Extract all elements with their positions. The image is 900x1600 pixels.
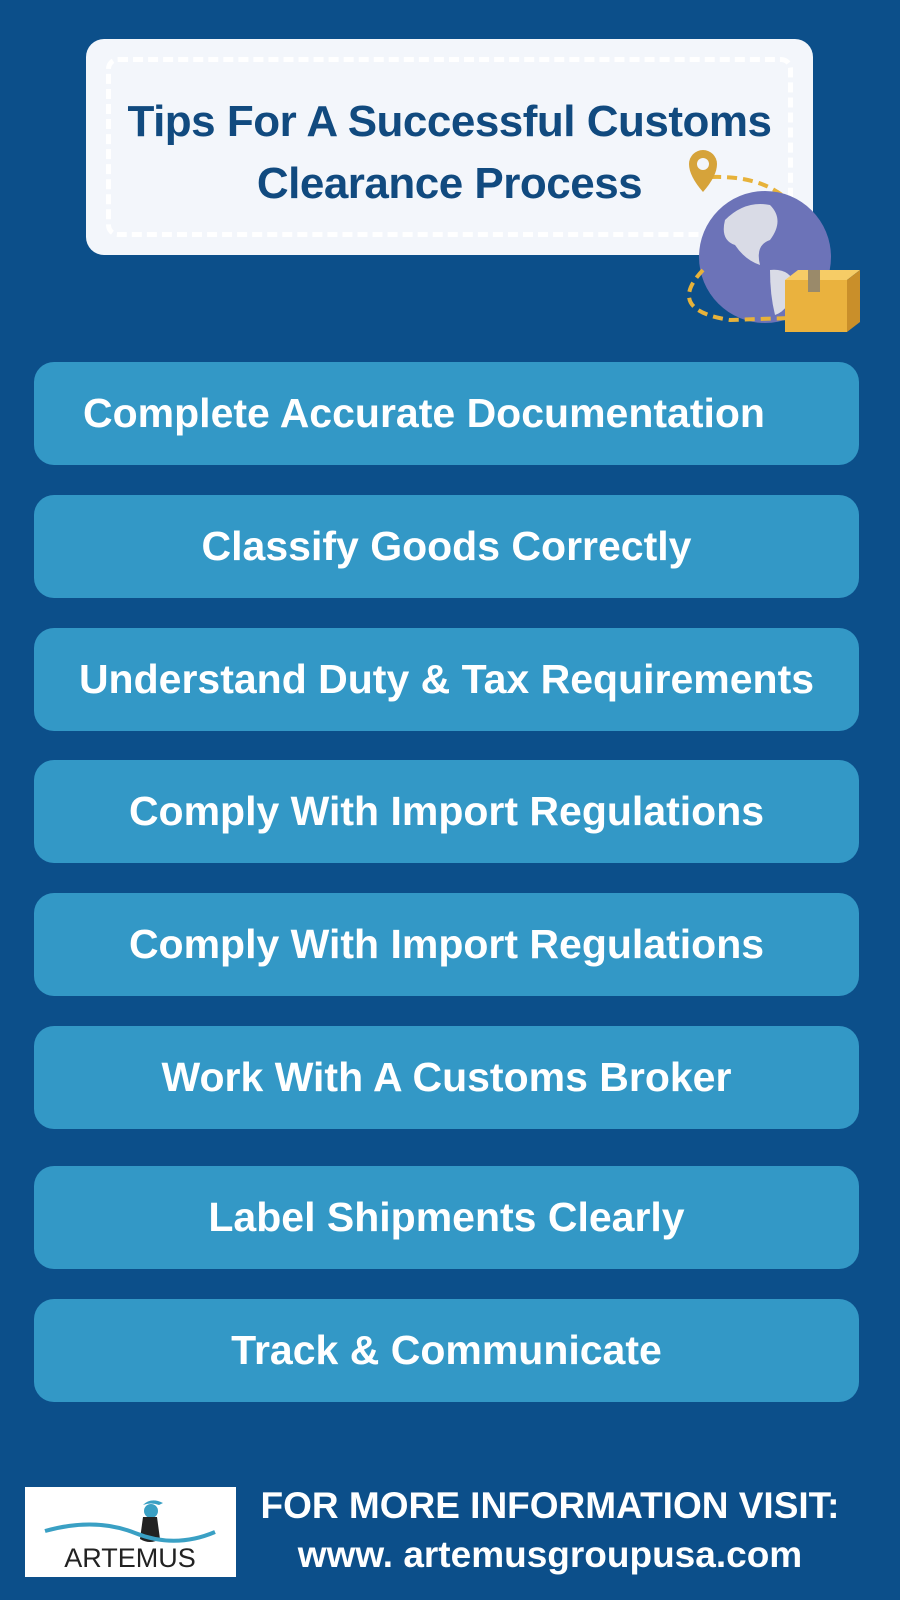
- bar 3: Understand Duty & Tax Requirements: [79, 656, 814, 702]
- bar 1: [34, 362, 859, 465]
- bar 3: [34, 628, 859, 731]
- bar 2: Classify Goods Correctly: [202, 523, 691, 569]
- bar 7: [34, 1166, 859, 1269]
- bar 5: Comply With Import Regulations: [129, 921, 764, 967]
- icon: globe with box and pin: [687, 150, 860, 332]
- logo: Artemus: [25, 1487, 236, 1577]
- bar 7: Label Shipments Clearly: [208, 1194, 685, 1240]
- bar 1: Complete Accurate Documentation: [83, 390, 765, 436]
- title heading: Tips For A Successful Customs: [127, 97, 772, 146]
- bar 4: [34, 760, 859, 863]
- bar 2: [34, 495, 859, 598]
- bar 5: [34, 893, 859, 996]
- bar 8: Track & Communicate: [231, 1327, 662, 1373]
- logo: Artemus: ARTEMUS: [64, 1543, 196, 1573]
- footer text: url: www. artemusgroupusa.com: [298, 1534, 802, 1575]
- bar 4: Comply With Import Regulations: [129, 788, 764, 834]
- title panel: [86, 39, 813, 255]
- bar 8: [34, 1299, 859, 1402]
- title heading: [127, 97, 772, 208]
- bar 6: [34, 1026, 859, 1129]
- bar 6: Work With A Customs Broker: [162, 1054, 731, 1100]
- title heading: Clearance Process: [257, 159, 642, 208]
- footer text: for more information: FOR MORE INFORMATION VISIT:: [261, 1485, 839, 1526]
